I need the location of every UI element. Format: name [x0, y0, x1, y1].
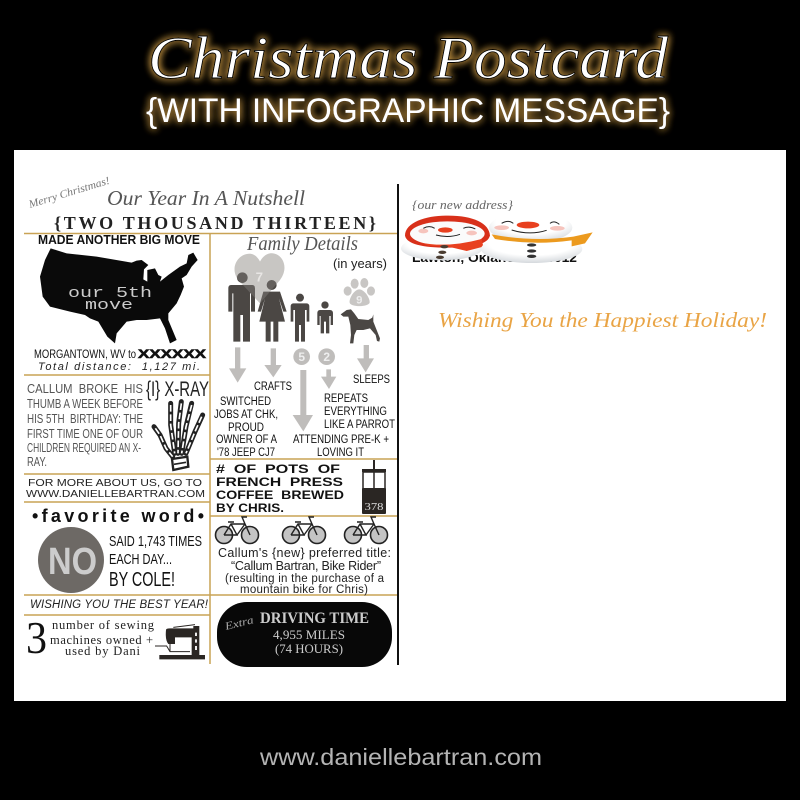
address label: {our new address}	[412, 197, 514, 212]
icon: french press	[362, 460, 386, 514]
panel: bikes: (resulting in the purchase of a	[225, 573, 385, 585]
covered address line: Lawton, Oklahoma 73012	[412, 250, 577, 265]
panel: french press: BY CHRIS.	[216, 503, 284, 515]
panel: bikes: Callum's {new} preferred title:	[218, 546, 391, 560]
panel: favorite word: BY COLE!	[109, 569, 175, 591]
panel: french press: COFFEE BREWED	[216, 490, 344, 502]
family member captions: EVERYTHING	[324, 406, 387, 418]
x-ray story text: CALLUM BROKE HIS	[27, 381, 143, 396]
panel: big move: MORGANTOWN, WV to	[34, 349, 136, 361]
title: {WITH INFOGRAPHIC MESSAGE}	[146, 92, 670, 130]
panel: favorite word: EACH DAY...	[109, 551, 172, 568]
family icons and arrows	[228, 253, 380, 431]
icon: french press: 378	[364, 502, 384, 513]
postcard heading: Our Year In A Nutshell	[107, 186, 305, 210]
x-ray story text	[27, 381, 143, 469]
panel: driving time: DRIVING TIME	[260, 610, 369, 627]
icon: snowmen	[400, 213, 593, 263]
x-ray story text: THUMB A WEEK BEFORE	[27, 396, 143, 411]
panel: favorite word: •favorite word•	[32, 506, 204, 526]
website footer: www.daniellebartran.com	[259, 744, 542, 770]
panel: driving time: (74 HOURS)	[275, 642, 343, 656]
icon: sewing machine	[155, 625, 205, 659]
dividers	[24, 234, 397, 664]
wishing line: WISHING YOU THE BEST YEAR!	[30, 599, 209, 611]
panel: big move: MADE ANOTHER BIG MOVE	[38, 233, 200, 247]
family member captions: CRAFTS	[254, 381, 292, 393]
panel: family details: (in years)	[333, 257, 387, 271]
title: Christmas Postcard	[148, 25, 669, 91]
website callout	[26, 477, 205, 500]
family member captions	[214, 374, 395, 459]
panel: x-ray: {I} X-RAY	[146, 378, 209, 401]
left snowman	[401, 216, 490, 260]
family member captions: ATTENDING PRE-K +	[293, 434, 389, 446]
panel: bikes	[216, 517, 391, 596]
family member captions: OWNER OF A	[216, 434, 277, 446]
panel: french press: FRENCH PRESS	[216, 477, 343, 489]
panel: sewing machines: used by Dani	[65, 644, 141, 658]
family member captions: LOVING IT	[317, 447, 364, 459]
panel: sewing machines: 3	[26, 612, 47, 663]
family member captions: SWITCHED	[220, 396, 271, 408]
panel: driving time: Extra	[223, 614, 255, 633]
icon: bicycles	[216, 517, 388, 544]
panel: favorite word: SAID 1,743 TIMES	[109, 533, 202, 550]
icon: no circle	[38, 527, 104, 593]
panel: french press: # OF POTS OF	[216, 464, 340, 476]
website callout: FOR MORE ABOUT US, GO TO	[28, 477, 202, 489]
panel: x-ray	[27, 378, 209, 470]
panel: driving time	[217, 602, 392, 667]
panel: bikes: “Callum Bartran, Bike Rider”	[231, 559, 381, 573]
family member captions: SLEEPS	[353, 374, 390, 386]
icon: hand x-ray	[154, 402, 203, 470]
right snowman	[481, 213, 593, 263]
website callout: WWW.DANIELLEBARTRAN.COM	[26, 488, 205, 500]
panel: favorite word	[32, 506, 204, 593]
title	[146, 25, 670, 130]
postcard panel	[14, 150, 786, 701]
panel: big move: XXXXXX	[138, 347, 206, 361]
family icons and arrows: 7	[256, 270, 263, 285]
panel: sewing machines: number of sewing	[52, 618, 155, 632]
panel: sewing machines: machines owned +	[50, 633, 153, 647]
postcard heading: {TWO THOUSAND THIRTEEN}	[54, 213, 376, 233]
panel: big move: Total distance: 1,127 mi.	[38, 361, 200, 373]
panel: big move: move	[85, 297, 133, 314]
map of the United States	[40, 248, 198, 343]
panel: family details	[214, 233, 395, 459]
family member captions: PROUD	[228, 422, 264, 434]
x-ray story text: FIRST TIME ONE OF OUR	[27, 426, 143, 441]
panel: driving time: 4,955 MILES	[273, 628, 345, 642]
postcard heading	[26, 175, 376, 233]
panel: big move: our 5th	[68, 285, 152, 302]
icon: no circle: NO	[48, 541, 97, 583]
panel: sewing machines	[26, 612, 205, 663]
family member captions: LIKE A PARROT	[324, 419, 395, 431]
family icons and arrows: 2	[323, 350, 330, 364]
panel: big move	[34, 233, 206, 373]
x-ray story text: HIS 5TH BIRTHDAY: THE	[27, 411, 143, 426]
x-ray story text: RAY.	[27, 454, 47, 469]
x-ray story text: CHILDREN REQUIRED AN X-	[27, 440, 141, 455]
holiday greeting: Wishing You the Happiest Holiday!	[438, 308, 767, 332]
panel: french press	[216, 460, 386, 515]
family member captions: JOBS AT CHK,	[214, 409, 278, 421]
family member captions: '78 JEEP CJ7	[217, 447, 275, 459]
family icons and arrows: 5	[298, 350, 305, 364]
panel: bikes: mountain bike for Chris)	[240, 584, 368, 596]
family icons and arrows: 9	[356, 294, 362, 306]
family member captions: REPEATS	[324, 393, 368, 405]
postcard heading: Merry Christmas!	[26, 175, 112, 211]
panel: family details: Family Details	[246, 233, 358, 255]
